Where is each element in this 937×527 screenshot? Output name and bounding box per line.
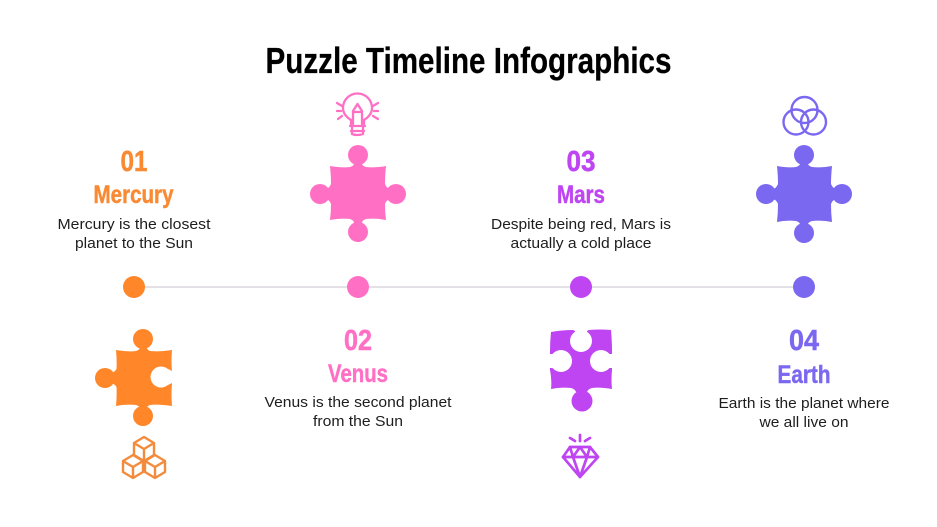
text block: Earth: Earth is the planet where xyxy=(718,395,890,412)
text block: Mars: Mars xyxy=(557,181,605,209)
text block: Mercury: Mercury xyxy=(94,181,174,209)
timeline dot: Earth xyxy=(793,276,815,298)
title: Puzzle Timeline Infographics xyxy=(266,40,672,81)
icon: light bulb xyxy=(337,94,378,135)
text block: Mars: 03 xyxy=(566,146,596,178)
text block: Mars: Despite being red, Mars is xyxy=(491,216,671,233)
text block: Mars: actually a cold place xyxy=(510,235,652,252)
text block: Earth: 04 xyxy=(789,325,819,357)
puzzle piece: pink xyxy=(310,145,406,242)
text block: Mercury: 01 xyxy=(120,146,148,178)
puzzle piece: purple xyxy=(548,328,614,412)
text block: Venus xyxy=(264,325,452,430)
text block: Mars xyxy=(491,146,671,252)
text block: Venus: Venus xyxy=(328,360,388,388)
icon: cubes xyxy=(123,437,165,478)
text block: Earth xyxy=(718,325,890,431)
icon: diamond xyxy=(563,435,598,477)
text block: Earth: we all live on xyxy=(758,414,848,431)
text block: Venus: Venus is the second planet xyxy=(264,394,452,411)
text block: Venus: 02 xyxy=(344,325,372,357)
text block: Mercury: Mercury is the closest xyxy=(58,216,211,233)
text block: Venus: from the Sun xyxy=(313,413,403,430)
text block: Mercury: planet to the Sun xyxy=(75,235,193,252)
text block: Mercury xyxy=(58,146,211,252)
text block: Earth: Earth xyxy=(778,361,830,389)
timeline dot: Mars xyxy=(570,276,592,298)
puzzle piece: orange xyxy=(95,329,172,426)
timeline dot: Venus xyxy=(347,276,369,298)
timeline dot: Mercury xyxy=(123,276,145,298)
puzzle piece: violet xyxy=(756,145,852,243)
icon: overlapping circles xyxy=(784,97,826,134)
timeline xyxy=(123,276,815,298)
